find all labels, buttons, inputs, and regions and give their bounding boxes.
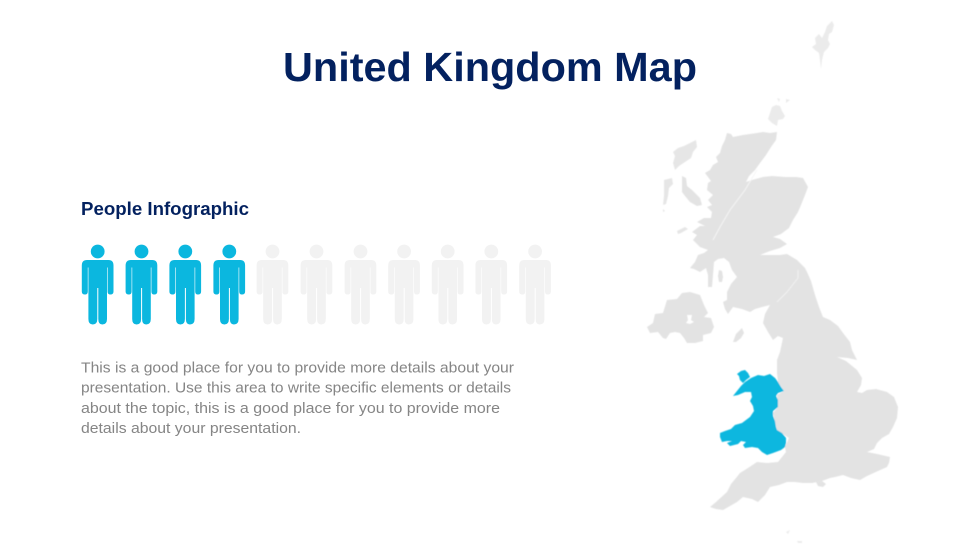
map: Wales (highlighted) <box>720 370 786 455</box>
heading: people infographic: People Infographic <box>81 199 249 219</box>
highlighted people <box>82 245 245 324</box>
map: Mull <box>677 227 688 234</box>
map: Shetland <box>812 21 834 69</box>
inactive people <box>257 245 551 324</box>
body text: This is a good place for you to provide more details about your <box>81 360 514 376</box>
map: Orkney <box>768 98 790 126</box>
map: Great Glen line <box>713 170 757 240</box>
map: Northern Ireland <box>647 292 714 343</box>
map: Great Britain <box>690 132 898 510</box>
body text: details about your presentation. <box>81 420 301 437</box>
map: Isle of Man <box>733 328 744 342</box>
map: Isle of Wight <box>816 481 826 487</box>
map: Skye <box>682 176 702 206</box>
title: United Kingdom Map <box>283 44 697 90</box>
people pictogram: 4 of 11 highlighted <box>82 245 551 324</box>
body text: about the topic, this is a good place for you to provide more <box>81 400 500 417</box>
map: Anglesey <box>737 370 750 383</box>
body text: presentation. Use this area to write specific elements or details <box>81 380 511 397</box>
map of the United Kingdom <box>647 21 898 543</box>
map: Scilly Isles <box>786 530 802 543</box>
map: Outer Hebrides <box>663 140 697 212</box>
map: Scotland-England border <box>777 270 798 302</box>
body text <box>81 360 514 437</box>
map: Arran <box>718 270 723 282</box>
